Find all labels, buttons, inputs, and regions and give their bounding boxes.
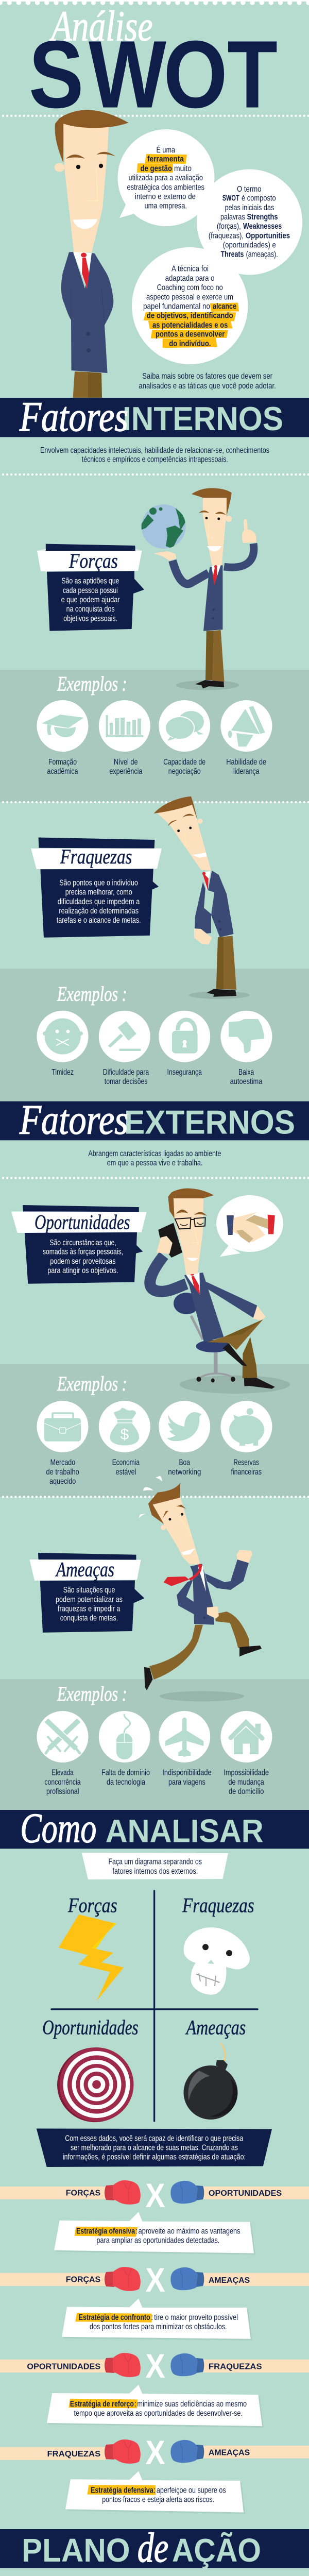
callout: estratégia de reforço: Estratégia de reforço [70, 2400, 134, 2409]
labels: forças examples: Habilidade de [226, 758, 266, 767]
callout: faça um diagrama [82, 1853, 228, 1879]
versus row: forças x oportunidades: X [145, 2176, 165, 2214]
speech bubble: termo SWOT [197, 169, 302, 275]
callout: cruzando as informações: ser melhorado para o alcance de suas metas. Cruzando as [71, 2144, 238, 2153]
description: Ameaças: São situações que [63, 1586, 115, 1595]
examples row: forças [37, 700, 272, 776]
icon: skull [184, 1927, 250, 1995]
labels: fraquezas examples [52, 1068, 262, 1086]
description: Ameaças: podem potencializar as [56, 1595, 123, 1604]
speech bubble: termo SWOT: O termo [237, 185, 262, 194]
labels: ameaças examples: da tecnologia [107, 1778, 145, 1787]
quadrant label: Ameaças: Ameaças [185, 2015, 246, 2039]
versus row: fraquezas x ameaças: X [145, 2433, 165, 2471]
heading: Fraquezas: Fraquezas [60, 845, 132, 868]
labels: ameaças examples: Falta de domínio [101, 1769, 150, 1777]
labels: fraquezas examples: Dificuldade para [103, 1068, 149, 1077]
speech bubble: ferramenta de gestão: interno e externo de [135, 192, 196, 201]
description: Forças: São as aptidões que [61, 577, 119, 586]
labels: oportunidades examples: Mercado [50, 1459, 75, 1467]
speech bubble: adaptada para o Coaching: aspecto pessoal e exerce um [146, 293, 233, 301]
versus row: fraquezas x ameaças: AMEAÇAS [209, 2449, 250, 2458]
callout: cruzando as informações [37, 2129, 272, 2167]
section banner: Fatores Internos [0, 393, 309, 440]
icon: bar chart [99, 700, 150, 752]
labels: oportunidades examples: Reservas [234, 1459, 259, 1467]
text: definição fatores externos: Abrangem características ligadas ao ambiente [88, 1149, 221, 1158]
section banner: Como Analisar: ANALISAR [106, 1814, 264, 1850]
callout: estratégia ofensiva: para ampliar as oportunidades detectadas. [97, 2236, 219, 2245]
speech bubble: termo SWOT: SWOT [222, 194, 239, 203]
description: Fraquezas [57, 878, 141, 925]
icon: money bag: $ [121, 1426, 129, 1443]
callout: estratégia de confronto [62, 2298, 252, 2341]
versus row: forças x oportunidades: OPORTUNIDADES [209, 2189, 282, 2198]
callout: estratégia de reforço: : [134, 2400, 136, 2409]
labels: fraquezas examples: Timidez [52, 1068, 74, 1077]
labels: forças examples [47, 758, 266, 776]
labels: oportunidades examples: aquecido [49, 1477, 76, 1486]
section banner: Plano de Ação: de [138, 2524, 168, 2571]
icon: piggy bank [220, 1401, 272, 1452]
quadrant label: Forças: Forças [67, 1894, 117, 1917]
speech bubble: termo SWOT: (oportunidades) e [223, 241, 276, 249]
icon: thumbs down [220, 1011, 272, 1062]
speech bubble: adaptada para o Coaching: Coaching com foco no [157, 283, 223, 292]
panel: Forças [37, 544, 144, 631]
icon: megaphone [220, 700, 272, 752]
section banner: Fatores Internos: Fatores [19, 393, 128, 440]
callout: faça um diagrama: fatores internos dos externos: [112, 1867, 198, 1876]
description: Fraquezas: realização de determinadas [59, 907, 139, 916]
panel: Fraquezas [31, 838, 162, 938]
labels: oportunidades examples: de trabalho [46, 1468, 79, 1477]
heading: Exemplos (forças): Exemplos : [57, 672, 127, 696]
versus row: forças x ameaças: X [145, 2261, 165, 2299]
description: Forças [61, 577, 120, 623]
speech bubble: termo SWOT: (forças), [217, 222, 241, 231]
speech bubble: adaptada para o Coaching: de objetivos, identificando [147, 311, 233, 320]
heading: Forças: Forças [68, 549, 118, 572]
labels: ameaças examples: de mudança [229, 1778, 264, 1787]
heading: Oportunidades: Oportunidades [35, 1210, 130, 1233]
text: definição fatores internos [40, 446, 269, 464]
versus row: oportunidades x fraquezas: X [145, 2347, 165, 2385]
panel: Oportunidades [11, 1205, 147, 1284]
heading: Exemplos (fraquezas): Exemplos : [57, 982, 127, 1006]
icon: speech bubbles [159, 700, 210, 752]
versus row: forças x ameaças [0, 2261, 309, 2299]
speech bubble: adaptada para o Coaching: pontos a desenvolver [156, 330, 225, 339]
section banner: Fatores Externos: EXTERNOS [124, 1103, 295, 1141]
versus row: fraquezas x ameaças [0, 2433, 309, 2471]
labels: fraquezas examples: tomar decisões [105, 1077, 148, 1086]
callout: estratégia defensiva [65, 2471, 245, 2514]
section banner: Como Analisar [0, 1804, 309, 1852]
labels: ameaças examples: Indisponibilidade [162, 1769, 212, 1777]
icon: open padlock [159, 1011, 210, 1062]
labels: fraquezas examples: autoestima [230, 1077, 262, 1086]
icon: face with sealed mouth [37, 1011, 89, 1062]
icon: bomb [183, 2043, 238, 2120]
description: Ameaças: fraquezas e impedir a [58, 1605, 120, 1614]
description: Oportunidades [43, 1239, 123, 1275]
icon: target [57, 2047, 134, 2122]
speech bubble: adaptada para o Coaching: alcance [213, 302, 236, 311]
versus row: forças x ameaças: FORÇAS [66, 2276, 100, 2284]
illustration: smiling businessman [55, 110, 128, 398]
text: definição fatores externos [88, 1149, 221, 1167]
speech bubble: adaptada para o Coaching: A técnica foi [171, 265, 209, 274]
callout: cruzando as informações: informações, é possível definir algumas estratégias de atuação: [63, 2153, 246, 2162]
section banner: Fatores Externos: Fatores [19, 1096, 128, 1143]
speech bubble: termo SWOT: Threats [221, 250, 244, 259]
callout: estratégia defensiva: aperfeiçoe ou supere os [157, 2486, 226, 2495]
labels: fraquezas examples: Insegurança [167, 1068, 202, 1077]
labels: forças examples: Formação [48, 758, 77, 767]
speech bubble: ferramenta de gestão: muito [174, 164, 192, 173]
icon: lightning bolt [59, 1914, 124, 2001]
labels: forças examples: Capacidade de [163, 758, 205, 767]
illustration: sad man looking down [153, 796, 250, 999]
speech bubble: termo SWOT: (fraquezas), [209, 231, 244, 240]
description: Fraquezas: tarefas e o alcance de metas. [57, 916, 141, 925]
description: Fraquezas: dificuldades que impedem a [58, 897, 140, 906]
title word Análise: Análise [49, 2, 152, 50]
speech bubble: termo SWOT: (ameaças). [246, 250, 278, 259]
speech bubble: ferramenta de gestão: de gestão [140, 164, 172, 173]
text: definição fatores externos: em que a pessoa vive e trabalha. [107, 1159, 202, 1167]
speech bubble: ferramenta de gestão: É uma [157, 145, 175, 155]
icon: bird [159, 1401, 210, 1452]
icon: gavel [99, 1011, 150, 1062]
callout: estratégia de confronto: : [151, 2313, 153, 2322]
labels: oportunidades examples: financeiras [231, 1468, 262, 1477]
labels: ameaças examples: Impossibilidade [224, 1769, 269, 1777]
heading: Exemplos (ameaças): Exemplos : [57, 1682, 127, 1705]
versus row: forças x oportunidades: FORÇAS [66, 2189, 100, 2197]
icon: money bag [99, 1401, 150, 1452]
speech bubble: termo SWOT: Opportunities [246, 231, 290, 240]
speech bubble: termo SWOT: pelas iniciais das [225, 204, 274, 212]
section banner: Plano de Ação [0, 2524, 309, 2571]
section banner: Fatores Internos: INTERNOS [123, 400, 283, 437]
labels: forças examples: Nível de [114, 758, 138, 767]
speech bubble: ferramenta de gestão: uma empresa. [144, 202, 187, 211]
examples row: oportunidades [37, 1401, 272, 1486]
speech bubble: adaptada para o Coaching [132, 247, 248, 364]
heading: Ameaças: Ameaças [55, 1558, 114, 1581]
labels: ameaças examples [44, 1769, 269, 1796]
callout: faça um diagrama: Faça um diagrama separando os [108, 1858, 202, 1867]
icon: house [220, 1711, 272, 1762]
icon: airplane [159, 1711, 210, 1762]
labels: ameaças examples: de domicílio [229, 1787, 264, 1796]
labels: oportunidades examples: Boa [179, 1459, 190, 1467]
versus row: oportunidades x fraquezas: FRAQUEZAS [209, 2362, 262, 2371]
versus row: fraquezas x ameaças: FRAQUEZAS [47, 2450, 100, 2459]
labels: forças examples: negociação [168, 767, 201, 776]
callout: cruzando as informações: Com esses dados, você será capaz de identificar o que precisa [65, 2134, 243, 2143]
labels: ameaças examples: Elevada [52, 1769, 74, 1777]
labels: forças examples: acadêmica [47, 767, 78, 776]
callout: estratégia ofensiva: : [135, 2227, 138, 2236]
intro text: saiba mais: Saiba mais sobre os fatores que devem ser [142, 372, 273, 381]
intro text: saiba mais [139, 372, 276, 391]
versus row: oportunidades x fraquezas [0, 2347, 309, 2385]
callout: estratégia ofensiva: Estratégia ofensiva [76, 2227, 135, 2236]
labels: ameaças examples: para viagens [168, 1778, 205, 1787]
description: Forças: na conquista dos [66, 605, 115, 614]
speech bubble: adaptada para o Coaching: as potencialidades e os [152, 321, 228, 330]
callout: estratégia de confronto: tire o maior proveito possível [154, 2313, 238, 2322]
description: Ameaças: conquista de metas. [60, 1614, 118, 1623]
versus row: forças x ameaças: AMEAÇAS [209, 2276, 250, 2285]
section banner: Plano de Ação: AÇÃO [172, 2532, 261, 2569]
icon: graduation cap [37, 700, 89, 752]
callout: estratégia defensiva: pontos fracos e esteja alerta aos riscos. [102, 2496, 214, 2504]
callout: estratégia ofensiva: aproveite ao máximo as vantagens [139, 2227, 240, 2236]
examples row: fraquezas [37, 1011, 272, 1086]
speech bubble: termo SWOT: é composto [242, 194, 276, 203]
speech bubble: termo SWOT: palavras [220, 213, 245, 222]
versus row: oportunidades x fraquezas: OPORTUNIDADES [27, 2362, 100, 2371]
icon: briefcase [37, 1401, 89, 1452]
speech bubble: ferramenta de gestão [117, 129, 214, 226]
speech bubble: ferramenta de gestão: ferramenta [147, 155, 184, 164]
labels: ameaças examples: profissional [46, 1787, 79, 1796]
speech bubble: termo SWOT: Strengths [247, 213, 278, 222]
title: Análise SWOT [29, 2, 278, 128]
title word SWOT: SWOT [29, 21, 278, 128]
section banner: Como Analisar: Como [20, 1804, 96, 1852]
icon: crossed swords [37, 1711, 89, 1762]
panel: Ameaças [29, 1553, 145, 1633]
callout: estratégia defensiva: Estratégia defensiva [91, 2486, 153, 2495]
illustration: man on phone sitting on chair [150, 1188, 290, 1394]
description: Fraquezas: precisa melhorar, como [65, 888, 132, 897]
labels: forças examples: liderança [233, 767, 260, 776]
description: Forças: objetivos pessoais. [63, 614, 117, 623]
intro text: saiba mais: analisados e as táticas que você pode adotar. [139, 382, 276, 391]
labels: oportunidades examples [46, 1459, 262, 1486]
description: Forças: e que podem ajudar [61, 596, 120, 604]
versus row: forças x oportunidades [0, 2176, 309, 2214]
labels: ameaças examples: concorrência [44, 1778, 81, 1787]
illustration: man holding globe [139, 488, 256, 690]
icon: computer mouse [99, 1711, 150, 1762]
speech bubble: ferramenta de gestão: estratégica dos ambientes [127, 183, 204, 192]
speech bubble: adaptada para o Coaching: do indivíduo. [169, 340, 211, 348]
callout: estratégia ofensiva [54, 2212, 255, 2255]
callout: estratégia defensiva: : [153, 2486, 156, 2495]
description: Fraquezas: São pontos que o indivíduo [59, 878, 138, 887]
description: Oportunidades: para atingir os objetivos. [47, 1266, 118, 1275]
labels: oportunidades examples: estável [116, 1468, 136, 1477]
speech bubble: ferramenta de gestão: utilizada para a avaliação [129, 174, 203, 182]
description: Ameaças [56, 1586, 123, 1623]
labels: oportunidades examples: Economia [112, 1459, 140, 1467]
section banner: Plano de Ação: PLANO [22, 2532, 130, 2569]
description: Forças: cada pessoa possui [63, 586, 118, 595]
description: Oportunidades: São circunstâncias que, [49, 1239, 116, 1247]
speech bubble: adaptada para o Coaching: adaptada para o [165, 274, 214, 283]
section banner: Fatores Externos [0, 1096, 309, 1143]
labels: oportunidades examples: networking [168, 1468, 201, 1477]
labels: forças examples: experiência [109, 767, 142, 776]
callout: estratégia de reforço [47, 2385, 264, 2428]
description: Oportunidades: somadas às forças pessoais, [43, 1248, 123, 1257]
callout: estratégia de reforço: minimize suas deficiências ao mesmo [137, 2400, 247, 2409]
diagram: SWOT quadrants [42, 1891, 258, 2122]
labels: fraquezas examples: Baixa [238, 1068, 254, 1077]
description: Oportunidades: podem ser proveitosas [50, 1257, 116, 1266]
callout: estratégia de reforço: tempo que aproveita as oportunidades de desenvolver-se. [74, 2409, 243, 2418]
illustration: worried man running [139, 1476, 262, 1701]
heading: Exemplos (oportunidades): Exemplos : [57, 1372, 127, 1395]
speech bubble: adaptada para o Coaching: papel fundamental no [143, 302, 210, 311]
examples row: ameaças [37, 1711, 272, 1796]
quadrant label: Fraquezas: Fraquezas [182, 1894, 254, 1917]
callout: estratégia de confronto: dos pontos fortes para minimizar os obstáculos. [90, 2323, 227, 2331]
callout: estratégia de confronto: Estratégia de confronto [79, 2313, 150, 2322]
quadrant label: Oportunidades: Oportunidades [42, 2015, 139, 2039]
speech bubble: termo SWOT: Weaknesses [243, 222, 282, 231]
text: definição fatores internos: técnicos e empíricos e competências intrapessoais. [82, 455, 228, 464]
speech bubble: handshake [216, 1195, 283, 1257]
